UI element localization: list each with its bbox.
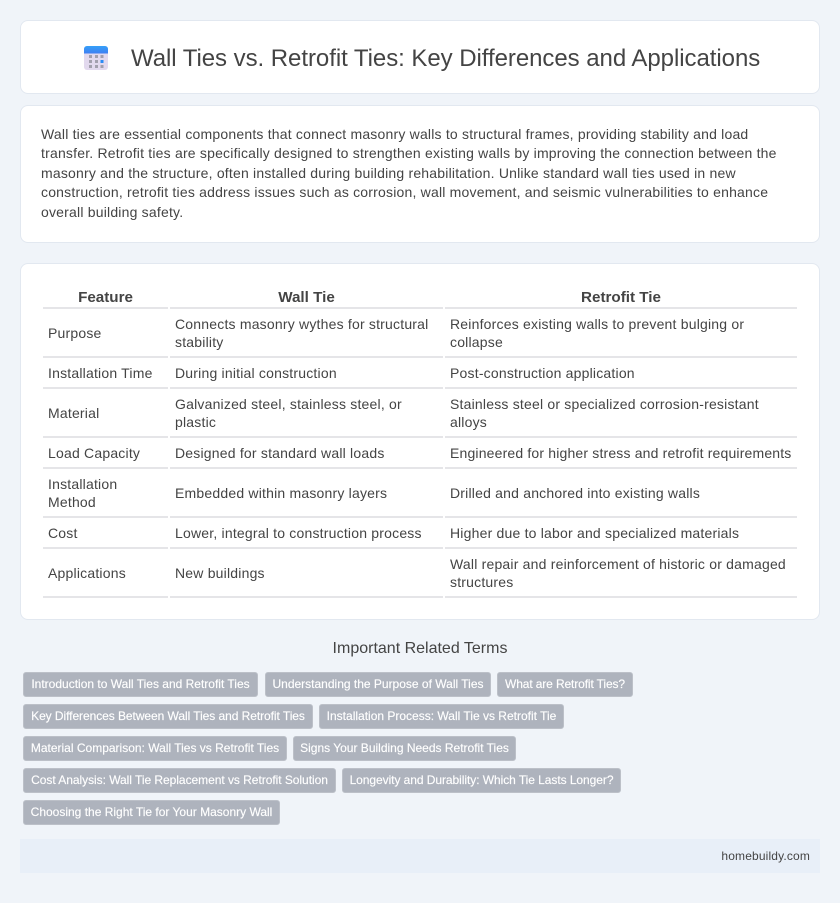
row: material: Galvanized steel, stainless steel, or: [175, 396, 402, 412]
intro text: overall building safety.: [41, 204, 183, 220]
panel: comparison table: [20, 263, 820, 620]
table header: wall tie: Wall Tie: [278, 288, 335, 306]
intro text: Wall ties are essential components that connect masonry walls to structural frames, providing stability and load: [41, 126, 748, 142]
row: installation time: Post-construction application: [450, 365, 635, 381]
related term chips: Material Comparison: Wall Ties vs Retrofit Ties: [31, 741, 279, 755]
row: installation time: Installation Time: [48, 365, 153, 381]
intro text: [41, 126, 777, 220]
row: purpose: collapse: [450, 334, 503, 350]
row: purpose: Purpose: [48, 325, 102, 341]
row: material: Stainless steel or specialized corrosion-resistant: [450, 396, 759, 412]
row: material: [48, 396, 759, 430]
related term chips: Understanding the Purpose of Wall Ties: [272, 677, 484, 691]
related term chips: Cost Analysis: Wall Tie Replacement vs Retrofit Solution: [31, 773, 328, 787]
row: applications: Wall repair and reinforcement of historic or damaged: [450, 556, 786, 572]
related term chips: Longevity and Durability: Which Tie Lasts Longer?: [350, 773, 613, 787]
row: material: Material: [48, 405, 99, 421]
row: installation time: [48, 365, 635, 381]
title: Wall Ties vs. Retrofit Ties: Key Differences and Applications: [131, 45, 760, 72]
row: load capacity: Load Capacity: [48, 445, 140, 461]
row: installation method: Embedded within masonry layers: [175, 485, 387, 501]
footer site name: homebuildy.com: [721, 849, 810, 863]
related term chips: What are Retrofit Ties?: [505, 677, 625, 691]
related term chips: Signs Your Building Needs Retrofit Ties: [300, 741, 509, 755]
row: purpose: Connects masonry wythes for structural: [175, 316, 428, 332]
heading: important related terms: Important Related Terms: [333, 640, 507, 657]
row: installation method: [48, 476, 700, 510]
row: installation time: During initial construction: [175, 365, 337, 381]
row: applications: [48, 556, 786, 590]
table header: retrofit tie: Retrofit Tie: [581, 288, 661, 306]
row: cost: Higher due to labor and specialized materials: [450, 525, 739, 541]
row: cost: Lower, integral to construction process: [175, 525, 422, 541]
table header: feature: Feature: [78, 288, 133, 306]
related term chips: Choosing the Right Tie for Your Masonry Wall: [31, 805, 272, 819]
row: purpose: stability: [175, 334, 223, 350]
row: cost: Cost: [48, 525, 78, 541]
row: load capacity: Designed for standard wall loads: [175, 445, 385, 461]
row: material: alloys: [450, 414, 487, 430]
row: applications: New buildings: [175, 565, 265, 581]
row: cost: [48, 525, 739, 541]
row: load capacity: Engineered for higher stress and retrofit requirements: [450, 445, 791, 461]
related term chips: Installation Process: Wall Tie vs Retrofit Tie: [327, 709, 556, 723]
row: material: plastic: [175, 414, 216, 430]
row: installation method: Installation: [48, 476, 117, 492]
icon: calendar: [84, 46, 108, 70]
related term chips: [23, 672, 633, 825]
row: purpose: [48, 316, 744, 350]
panel: introduction: [20, 105, 820, 243]
row: load capacity: [48, 445, 791, 461]
intro text: transfer. Retrofit ties are specifically designed to strengthen existing walls by improving the connection between the: [41, 145, 777, 161]
row: applications: Applications: [48, 565, 126, 581]
intro text: construction, retrofit ties address issues such as corrosion, wall movement, and seismic vulnerabilities to enhance: [41, 184, 768, 200]
row: purpose: Reinforces existing walls to prevent bulging or: [450, 316, 744, 332]
header panel: [20, 20, 820, 94]
footer bar: [20, 839, 820, 873]
intro text: masonry and the structure, often installed during building rehabilitation. Unlike standard wall ties used in new: [41, 165, 736, 181]
row: applications: structures: [450, 574, 513, 590]
related term chips: Introduction to Wall Ties and Retrofit Ties: [31, 677, 250, 691]
row: installation method: Drilled and anchored into existing walls: [450, 485, 700, 501]
related term chips: Key Differences Between Wall Ties and Retrofit Ties: [31, 709, 305, 723]
row: installation method: Method: [48, 494, 96, 510]
